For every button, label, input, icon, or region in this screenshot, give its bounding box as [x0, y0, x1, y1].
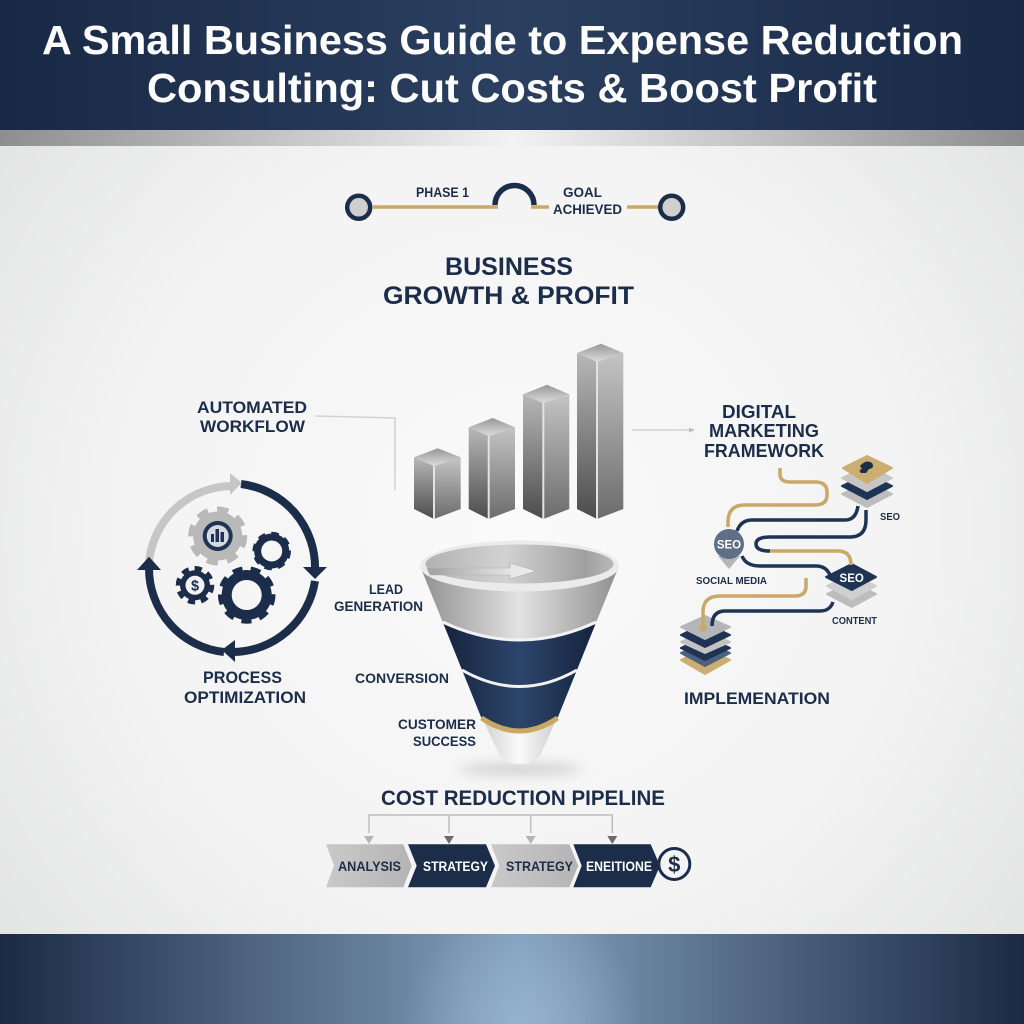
title: [42, 17, 963, 111]
top stack: [842, 456, 892, 507]
label: automated workflow: [197, 398, 307, 436]
label: digital marketing framework: [704, 402, 824, 461]
cycle arrows: [137, 473, 327, 662]
funnel tip: [483, 720, 556, 764]
label: content: CONTENT: [832, 615, 878, 627]
chevron: enetione: ENEITIONE: [586, 859, 652, 874]
header band: [0, 0, 1024, 146]
label: digital marketing framework: FRAMEWORK: [704, 441, 824, 461]
chevron: analysis: ANALYSIS: [338, 859, 401, 874]
funnel shadow: [458, 764, 582, 774]
funnel labels: SUCCESS: [413, 733, 476, 749]
label: automated workflow: WORKFLOW: [200, 417, 306, 436]
chevron: strategy navy: [408, 844, 495, 887]
funnel white divider: [462, 670, 577, 686]
marketing network: [681, 456, 900, 674]
icon: dollar coin: [659, 848, 690, 880]
label: process optimization: [184, 668, 306, 707]
bar 1: [414, 448, 461, 519]
heading: business growth and profit: GROWTH & PROFIT: [383, 282, 634, 310]
phase timeline: GOAL: [563, 185, 602, 200]
small ring gear: [255, 534, 289, 568]
phase timeline: PHASE 1: [416, 185, 469, 200]
title: A Small Business Guide to Expense Reduction: [42, 17, 963, 63]
navy route lines: [712, 506, 866, 626]
bar 4: [577, 344, 623, 519]
funnel labels: [334, 581, 476, 749]
grey gear with chart badge: [191, 510, 244, 562]
funnel navy band: [443, 622, 596, 730]
label: digital marketing framework: DIGITAL: [722, 402, 796, 422]
funnel: [420, 540, 619, 774]
middle stack: SEO: [840, 573, 864, 585]
funnel labels: GENERATION: [334, 598, 423, 614]
title: Consulting: Cut Costs & Boost Profit: [147, 65, 877, 111]
arrow: bars to digital marketing: [632, 428, 695, 432]
chevron: strategy grey: [491, 844, 578, 887]
funnel arrow: [427, 563, 536, 579]
funnel labels: LEAD: [369, 581, 403, 597]
funnel labels: CUSTOMER: [398, 716, 476, 732]
label: social media: SOCIAL MEDIA: [696, 575, 767, 587]
label: implementation: IMPLEMENATION: [684, 689, 830, 708]
bar 2: [469, 418, 515, 519]
funnel rim: [420, 540, 619, 592]
heading: business growth and profit: [383, 253, 634, 310]
connector: workflow to bars: [315, 416, 395, 490]
dollar gear: $: [191, 578, 199, 594]
heading: business growth and profit: BUSINESS: [445, 253, 573, 281]
pipeline chevrons: [326, 844, 690, 887]
chevron: enetione: [573, 844, 660, 887]
label: process optimization: OPTIMIZATION: [184, 688, 306, 707]
icon: dollar coin: $: [668, 852, 680, 877]
bar chart: [414, 344, 623, 519]
chevron: strategy navy: STRATEGY: [423, 859, 488, 874]
label: process optimization: PROCESS: [203, 668, 282, 687]
funnel grey band: [420, 566, 619, 640]
bottom stack: [681, 616, 730, 674]
bar 3: [523, 385, 569, 519]
dollar gear: [178, 568, 212, 602]
label: automated workflow: AUTOMATED: [197, 398, 307, 417]
pipeline connector: [364, 815, 617, 844]
chevron: analysis: [326, 844, 412, 887]
heading: cost reduction pipeline: COST REDUCTION PIPELINE: [381, 787, 665, 810]
process cycle with gears: [137, 473, 327, 662]
middle stack: [826, 564, 876, 607]
funnel labels: CONVERSION: [355, 670, 449, 686]
footer band: [0, 934, 1024, 1024]
phase timeline: [347, 185, 683, 219]
label: seo: SEO: [880, 511, 900, 523]
phase timeline: ACHIEVED: [553, 202, 622, 217]
gold route lines: [701, 468, 851, 630]
large gear: [221, 569, 273, 621]
seo location pin: [714, 529, 744, 569]
funnel gold ring: [482, 718, 558, 731]
label: digital marketing framework: MARKETING: [709, 421, 819, 441]
seo location pin: SEO: [717, 540, 741, 552]
chevron: strategy grey: STRATEGY: [506, 859, 573, 874]
